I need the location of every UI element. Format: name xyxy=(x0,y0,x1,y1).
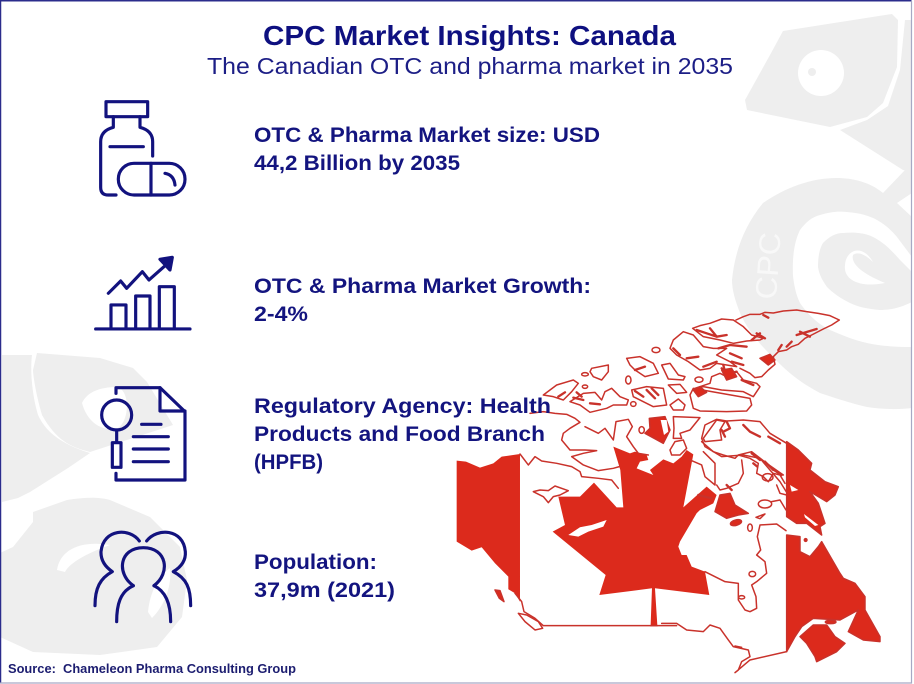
Arctic archipelago xyxy=(520,310,839,495)
Cornwallis group xyxy=(695,372,760,397)
Bathurst Island xyxy=(632,387,667,407)
watermark: chameleon top right xyxy=(732,14,912,409)
Somerset Island xyxy=(673,417,700,438)
maple leaf xyxy=(553,447,717,625)
Melville Peninsula xyxy=(670,440,687,455)
icon: document with magnifier xyxy=(102,388,185,480)
red blobs on Arctic islands xyxy=(693,354,775,397)
title: CPC Market Insights: Canada xyxy=(263,20,676,51)
text: regulatory agency: (HPFB) xyxy=(254,450,323,474)
Vancouver Island xyxy=(518,613,543,630)
icon: medicine bottle and pill xyxy=(101,102,185,195)
Devon Island xyxy=(690,388,752,412)
Southampton Island xyxy=(715,493,748,518)
Amund Ringnes Island xyxy=(662,363,685,380)
Prince Edward Island xyxy=(825,620,836,624)
Ellesmere Island xyxy=(736,310,839,378)
Mansel Island xyxy=(730,519,742,527)
Ellef Ringnes Island xyxy=(627,357,658,377)
Banks Island xyxy=(543,380,578,400)
eastern Canada and Hudson Bay xyxy=(662,442,880,673)
British Columbia coast xyxy=(515,593,677,626)
Great Bear Lake xyxy=(533,486,568,503)
text: regulatory agency: Regulatory Agency: Health xyxy=(254,394,551,418)
text: market size: 44,2 Billion by 2035 xyxy=(254,151,460,175)
Prince Patrick Island xyxy=(590,365,608,380)
Arctic red channel details xyxy=(558,315,817,443)
icon: group of people xyxy=(95,532,191,622)
text: population: Population: xyxy=(254,550,377,574)
watermark label: CPC: CPC xyxy=(750,231,788,300)
Foxe Basin and southern Baffin outlines xyxy=(690,442,787,510)
stem base xyxy=(651,623,657,628)
Anticosti dots xyxy=(804,539,807,541)
flag red band east upper xyxy=(787,442,838,535)
text: market growth: OTC & Pharma Market Growth: xyxy=(254,274,591,298)
flag red band west xyxy=(457,454,520,602)
text: regulatory agency xyxy=(254,394,551,474)
Baffin Island xyxy=(702,419,788,495)
text: market size: OTC & Pharma Market size: USD xyxy=(254,123,600,147)
Maritimes xyxy=(800,625,845,662)
map of Canada with flag overlay xyxy=(457,310,880,673)
text: market growth: 2-4% xyxy=(254,302,308,326)
text: regulatory agency: Products and Food Branch xyxy=(254,422,545,446)
Haida Gwaii xyxy=(495,590,504,602)
flag red band east lower xyxy=(787,535,880,652)
Ungava holes xyxy=(790,485,818,526)
icon: growth chart xyxy=(96,257,190,329)
text: market size xyxy=(254,123,600,175)
watermark: chameleon bottom left xyxy=(0,353,187,655)
Hudson Bay coast xyxy=(705,524,786,612)
Axel Heiberg Island xyxy=(670,332,737,370)
King William Island xyxy=(645,417,670,443)
flag: leaf and western band xyxy=(457,447,717,630)
text: population: 37,9m (2021) xyxy=(254,578,395,602)
Melville Island xyxy=(570,388,628,412)
Great Slave Lake xyxy=(568,520,607,537)
source note: Source: Chameleon Pharma Consulting Group xyxy=(8,661,296,676)
Baffin south red details xyxy=(698,453,782,498)
subtitle: The Canadian OTC and pharma market in 2035 xyxy=(207,53,733,79)
text: population xyxy=(254,550,395,602)
small islands xyxy=(582,347,703,433)
text: market growth xyxy=(254,274,591,326)
US border and Great Lakes xyxy=(662,623,787,673)
north mainland coast xyxy=(530,412,619,471)
Lake Huron detail xyxy=(735,646,742,647)
